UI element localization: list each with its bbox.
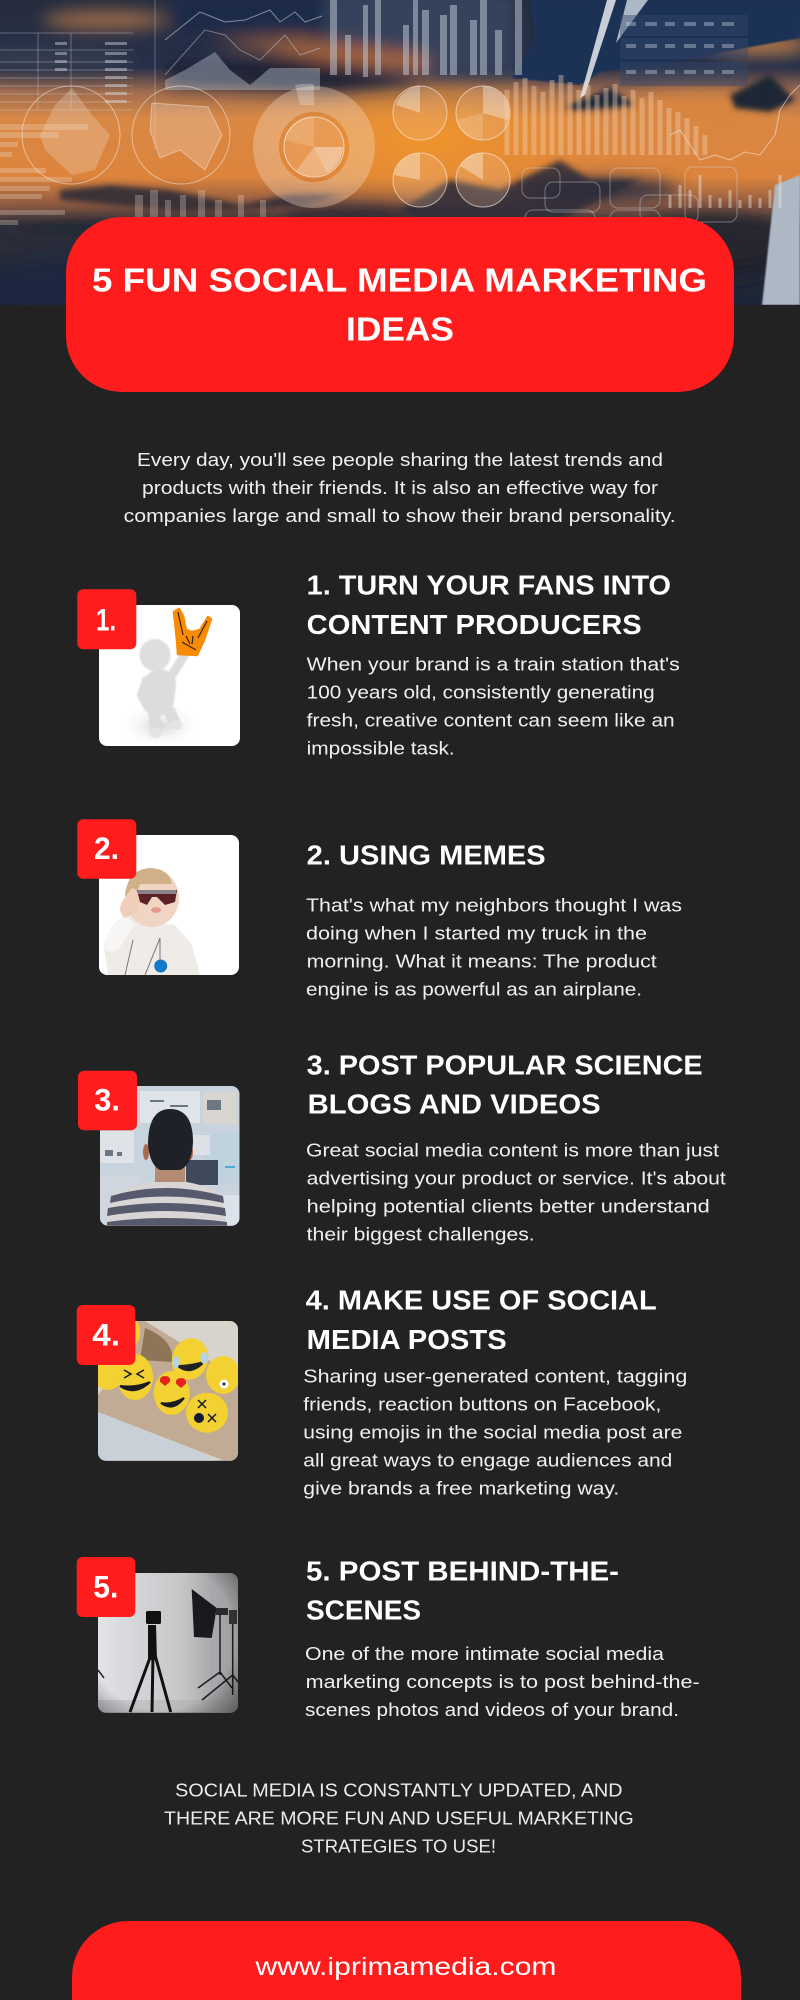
title heading: 5 FUN SOCIAL MEDIA MARKETING [92,263,707,300]
orange bars [507,75,705,155]
panel: idea 4 [77,1285,687,1498]
heading 1: 1. TURN YOUR FANS INTO [307,570,671,601]
price grid [620,15,748,86]
text: idea 3: advertising your product or service. It's about [307,1167,727,1188]
text: idea 1: 100 years old, consistently generating [307,682,655,703]
heading 2: 2. USING MEMES [307,840,546,871]
intro paragraph [124,449,676,526]
text: idea 3: Great social media content is more than just [306,1139,720,1160]
donut chart [266,99,362,195]
text: idea 2: doing when I started my truck in the [306,922,647,943]
hero image: businessman with sunset and data charts [0,0,800,320]
heading 3: BLOGS AND VIDEOS [308,1088,601,1119]
text: idea 2 [306,894,682,999]
text: idea 3: their biggest challenges. [307,1223,535,1244]
heading 3: 3. POST POPULAR SCIENCE [307,1050,703,1081]
heading 5: SCENES [306,1594,421,1625]
panel: idea 2 [77,819,682,999]
data table [0,0,155,150]
text: idea 3 [306,1139,727,1244]
closing statement: SOCIAL MEDIA IS CONSTANTLY UPDATED, AND [175,1781,622,1801]
intro paragraph: companies large and small to show their brand personality. [124,505,676,526]
text: idea 2: engine is as powerful as an airplane. [306,978,642,999]
number badge 5: 5. [93,1568,118,1604]
title pill [66,217,734,392]
intro paragraph: Every day, you'll see people sharing the latest trends and [137,449,663,470]
heading 5 [306,1556,619,1625]
heading 4: 4. MAKE USE OF SOCIAL [306,1285,657,1316]
text: idea 4: using emojis in the social media post are [303,1421,682,1442]
heading 1: CONTENT PRODUCERS [307,609,642,640]
text: idea 4: give brands a free marketing way. [303,1477,619,1498]
heading 1 [307,570,671,640]
text: idea 4 [303,1365,687,1498]
suit [512,0,800,305]
image: man facing a wall of plans [100,1086,240,1227]
text: idea 5: One of the more intimate social media [305,1643,665,1664]
heading 4: MEDIA POSTS [307,1324,507,1355]
lower-right boxes and noise chart [522,167,737,230]
line chart [165,10,322,40]
left bars [0,124,266,225]
heading 5: 5. POST BEHIND-THE- [306,1556,619,1587]
radar charts [22,86,230,184]
number badge 4 [77,1305,135,1365]
website URL: www.iprimamedia.com [254,1953,556,1981]
number badge 1 [77,589,136,649]
image: 3D figure with foam hand [99,605,240,748]
panel: idea 1 [77,570,680,758]
text: idea 1: fresh, creative content can seem like an [307,710,675,731]
top bars [330,0,522,77]
number badge 1: 1. [96,602,116,638]
text: idea 5 [305,1643,700,1720]
text: idea 4: friends, reaction buttons on Facebook, [303,1393,661,1414]
text: idea 2: That's what my neighbors thought I was [306,894,682,915]
image: photo studio with tripod and softbox [98,1573,238,1713]
text: idea 2: morning. What it means: The product [307,950,658,971]
text: idea 5: scenes photos and videos of your brand. [305,1699,679,1720]
image: baby with sunglasses [99,835,239,975]
heading 3 [307,1050,703,1119]
panel: idea 5 [77,1556,700,1720]
number badge 2: 2. [94,830,119,866]
closing statement: STRATEGIES TO USE! [301,1837,496,1857]
text: idea 3: helping potential clients better understand [307,1195,710,1216]
number badge 3: 3. [94,1082,120,1118]
title heading [92,263,707,349]
number badge 5 [77,1557,135,1617]
footer pill with website [72,1921,741,2000]
number badge 2 [77,819,136,879]
image: emoji eggs in a carton [92,1318,240,1461]
title heading: IDEAS [346,312,454,349]
text: idea 4: all great ways to engage audiences and [303,1449,672,1470]
pie charts [393,86,510,207]
intro paragraph: products with their friends. It is also an effective way for [142,477,658,498]
text: idea 1: When your brand is a train station that's [307,654,680,675]
number badge 4: 4. [92,1316,120,1352]
heading 4 [306,1285,657,1355]
text: idea 4: Sharing user-generated content, tagging [303,1365,687,1386]
closing statement: THERE ARE MORE FUN AND USEFUL MARKETING [164,1809,634,1829]
text: idea 1 [307,654,680,758]
number badge 3 [78,1071,137,1130]
panel: idea 3 [78,1050,727,1244]
text: idea 5: marketing concepts is to post behind-the- [306,1671,700,1692]
closing statement [164,1781,634,1857]
text: idea 1: impossible task. [307,737,455,758]
